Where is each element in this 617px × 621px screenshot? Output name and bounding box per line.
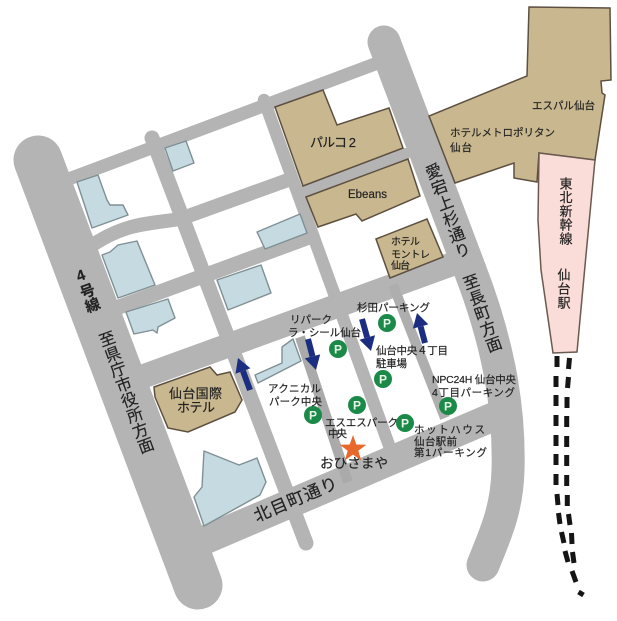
road: second vertical street (264, 100, 390, 448)
label: Hotel Metropolitan Sendai: ホテルメトロポリタン (450, 127, 555, 139)
label: Hotel Montre Sendai: ホテル (391, 236, 420, 248)
label: SS Park Chuo: エスエスパーク (325, 417, 398, 429)
parking: Repark (329, 340, 347, 358)
label: Sendai Station: 仙台駅 (556, 268, 570, 310)
label: NPC24H Sendai Chuo 4-chome Parking: NPC24H 仙台中央 (432, 373, 516, 386)
building: Ebeans (306, 159, 420, 227)
building: blue 1 (77, 175, 128, 228)
parking: Sugita (378, 314, 396, 332)
road: fourth cross street (125, 260, 462, 383)
parking: Sendai Chuo 4-chome: P (379, 372, 387, 386)
building: Parco 2 (275, 90, 403, 186)
parking: Acnical Park: P (309, 408, 317, 422)
label: S-PAL Sendai: エスパル仙台 (532, 99, 595, 112)
label: Repark La Seal Sendai: ラ・シール仙台 (288, 326, 361, 339)
road: first vertical street (152, 138, 306, 543)
station labels (556, 176, 572, 310)
parking: Repark: P (334, 342, 342, 356)
label: Acnical Park Chuo: パーク中央 (269, 395, 322, 408)
building: blue 3 (102, 241, 155, 298)
label: NPC24H Sendai Chuo 4-chome Parking: 4丁目パーキング (432, 386, 516, 399)
building: blue 6 (257, 214, 307, 249)
label: Ebeans: Ebeans (348, 189, 387, 201)
label: Hotel Montre Sendai (391, 236, 430, 272)
label: toward prefectural and city office: 至県庁市役所方面 (94, 328, 156, 457)
road: Kitame-machi street (200, 414, 500, 542)
building labels (169, 99, 595, 415)
building: blue 5 (217, 265, 271, 310)
road: third cross street (100, 236, 312, 314)
label: Parco 2: パルコ 2 (310, 135, 356, 150)
label: Tohoku Shinkansen: 東北新幹線 (558, 176, 572, 246)
building: blue 7 (255, 339, 301, 383)
arrow: up left (236, 358, 250, 390)
label: Hotel Metropolitan second line: 仙台 (450, 141, 472, 154)
label: Sendai Kokusai Hotel: ホテル (177, 400, 215, 415)
parking markers (304, 314, 457, 432)
road: second cross street (88, 180, 288, 248)
label: Atago-Kamisugi street: 愛宕上杉通り (421, 161, 473, 262)
label: Sendai Kokusai Hotel (169, 386, 222, 415)
label: Sendai Chuo 4-chome Parking: 仙台中央４丁目 (376, 344, 448, 357)
label: Ohisamaya: おひさまや (320, 456, 388, 471)
building: blue 2 (165, 141, 194, 171)
Tohoku Shinkansen station (538, 153, 595, 353)
parking: NPC24H (439, 397, 457, 415)
parking: Sendai Chuo 4-chome (374, 370, 392, 388)
building: Hotel Montre Sendai (376, 219, 443, 278)
label: Sendai Chuo 4-chome Parking: 駐車場 (376, 357, 408, 370)
road network (38, 42, 508, 585)
building: blue 4 (126, 299, 175, 334)
label: Hot House Sendai Ekimae Parking 1: 第1パーキング (414, 446, 488, 459)
road: Atago-Kamisugi street (384, 42, 508, 565)
label: SS Park Chuo: 中央 (328, 427, 348, 440)
parking: NPC24H: P (444, 400, 452, 414)
railway track (556, 356, 584, 595)
label: Kitame-machi street: 北目町通り (251, 473, 341, 526)
building: S-PAL and Hotel Metropolitan (429, 7, 611, 183)
road labels (70, 161, 504, 526)
road: narrow street one (300, 337, 348, 482)
blue buildings (77, 141, 307, 526)
arrow: down first (305, 339, 320, 370)
label: toward Nagamachi: 至長町方面 (458, 271, 504, 356)
tan buildings (154, 7, 611, 432)
arrow: down second (360, 319, 375, 351)
label: Repark La Seal Sendai (288, 314, 361, 339)
parking: Hot House (396, 414, 414, 432)
parking: Sugita: P (383, 316, 391, 330)
label: Hotel Montre Sendai: 仙台 (391, 259, 410, 272)
building: Sendai Kokusai Hotel (154, 367, 242, 432)
label: Sugita Parking: 杉田パーキング (357, 301, 430, 314)
label: Hot House Sendai Ekimae Parking 1: 仙台駅前 (414, 435, 457, 448)
label: Repark La Seal Sendai: リパーク (290, 314, 332, 326)
parking: SS Park (348, 396, 366, 414)
parking: Hot House: P (401, 416, 409, 430)
label: Sendai Chuo 4-chome Parking (376, 344, 448, 370)
label: Hotel Montre Sendai: モントレ (391, 250, 430, 261)
label: Acnical Park Chuo (268, 383, 322, 408)
arrow: up right (413, 313, 428, 343)
label: route 4: 4号線 (70, 265, 102, 316)
label: NPC24H Sendai Chuo 4-chome Parking (432, 373, 516, 399)
label: Hot House Sendai Ekimae Parking 1: ホットハウス (414, 424, 485, 436)
road: route 4 (38, 160, 198, 585)
road: narrow street two (393, 285, 445, 418)
label: Acnical Park Chuo: アクニカル (268, 383, 321, 395)
label: SS Park Chuo (325, 417, 398, 440)
label: Hot House Sendai Ekimae Parking 1 (414, 424, 488, 459)
building: blue 8 (194, 451, 266, 526)
label: Sendai Kokusai Hotel: 仙台国際 (169, 386, 222, 401)
road: gap between Parco and Ebeans (298, 154, 405, 193)
parking labels (268, 301, 516, 459)
parking: SS Park: P (353, 398, 361, 412)
icon: orange star marking Ohisamaya (340, 435, 366, 460)
parking: Acnical Park (304, 406, 322, 424)
road: top cross street (50, 64, 375, 186)
